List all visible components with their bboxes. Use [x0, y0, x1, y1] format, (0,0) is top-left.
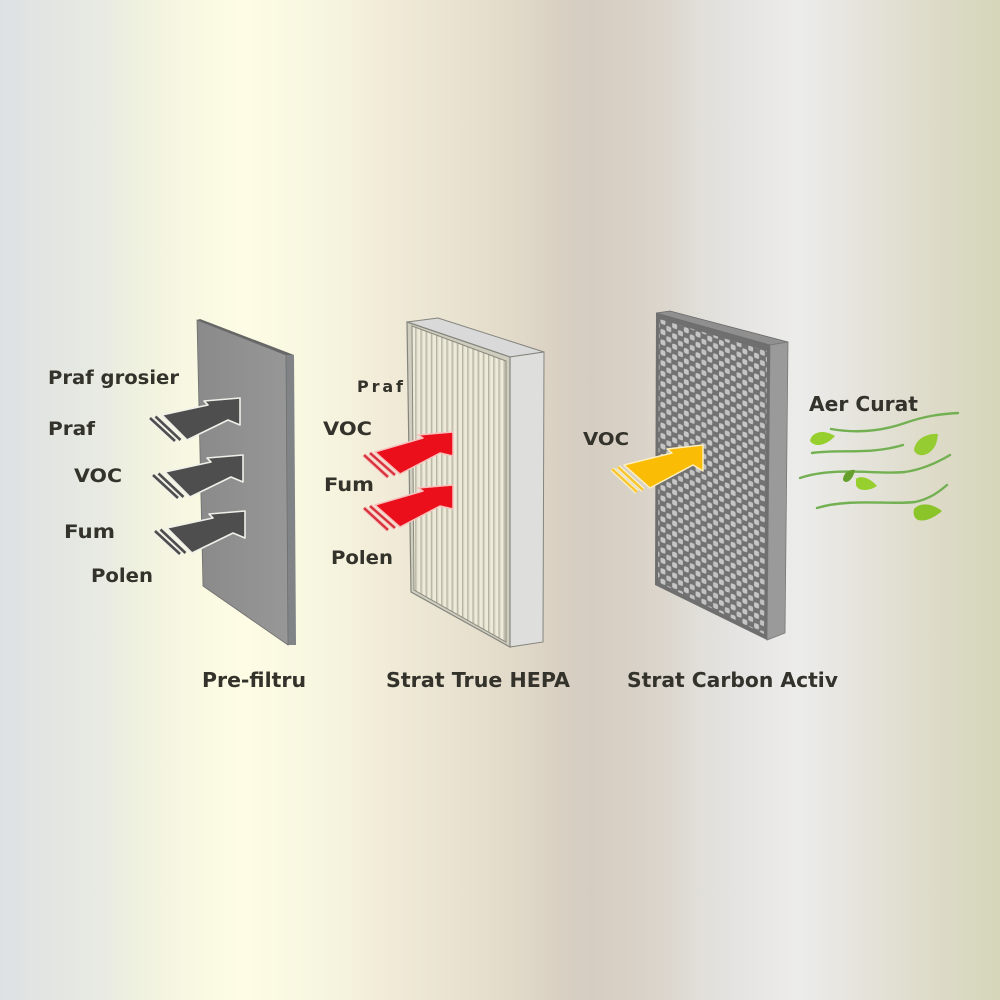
- grey stripes: [155, 530, 186, 554]
- panel: pre-filter: [197, 319, 296, 645]
- HEPA pleats: [412, 327, 506, 641]
- label: Polen HEPA: Polen: [331, 547, 393, 569]
- white stripe halo: [155, 530, 186, 554]
- label: VOC: VOC: [74, 465, 122, 487]
- arrow dark stripes: [150, 416, 180, 441]
- caption: Strat Carbon Activ: Strat Carbon Activ: [627, 668, 838, 692]
- stripe halo: [364, 506, 395, 530]
- grey arrow: [167, 511, 245, 553]
- arrow shape: [165, 455, 243, 497]
- carbon top face: [656, 311, 788, 345]
- carbon honeycomb mesh: [658, 319, 767, 634]
- label: Polen: Polen: [91, 566, 153, 587]
- arrow tail stripes: [150, 416, 180, 441]
- arrow body: [162, 398, 240, 440]
- HEPA top face: [407, 318, 544, 357]
- label: Praf HEPA: Praf: [357, 377, 404, 396]
- panel: True HEPA filter: [407, 318, 544, 650]
- leaf 4: [856, 477, 877, 490]
- arrow: carbon: [612, 445, 703, 492]
- HEPA front frame: [407, 322, 510, 647]
- label: VOC HEPA: VOC: [323, 418, 372, 440]
- caption: Pre-filtru: Pre-filtru: [202, 668, 306, 692]
- label: Fum HEPA: Fum: [324, 474, 374, 496]
- label: Praf grosier: Praf grosier: [48, 368, 180, 389]
- pre-filter front face: [197, 320, 288, 645]
- icon: clean air wind and leaves: [800, 413, 958, 521]
- pre-filter side: [286, 355, 296, 645]
- label: VOC carbon: VOC: [583, 429, 629, 450]
- HEPA side face: [510, 352, 544, 647]
- red arrow shape: [375, 485, 453, 527]
- pale stripe halo: [612, 467, 643, 492]
- dark stripes: [153, 474, 184, 498]
- caption: Strat True HEPA: Strat True HEPA: [386, 668, 571, 692]
- pre-filter top edge: [197, 319, 294, 356]
- arrow: HEPA top: [364, 432, 453, 477]
- carbon frame: [655, 313, 770, 640]
- label: Praf: Praf: [48, 418, 96, 440]
- red stripes: [364, 453, 395, 477]
- leaf 5: [914, 504, 942, 521]
- yellow arrow body: [624, 445, 703, 488]
- red tail stripes: [364, 506, 395, 530]
- leaf 1: [810, 432, 835, 445]
- label: Aer Curat: Aer Curat: [809, 392, 918, 416]
- label: Fum: Fum: [64, 521, 115, 543]
- leaf 3: [843, 470, 855, 482]
- leaf 2: [914, 434, 938, 455]
- stripe halo: [153, 474, 184, 498]
- arrow: pre-filter bottom: [155, 511, 245, 554]
- arrow: pre-filter middle: [153, 455, 243, 498]
- red arrow body: [375, 432, 453, 474]
- wind lines: [800, 413, 958, 508]
- yellow stripes: [612, 467, 643, 492]
- pink stripe halo: [364, 453, 395, 477]
- arrow: pre-filter top: [150, 398, 240, 441]
- arrow: HEPA bottom: [364, 485, 453, 530]
- HEPA inner edge: [412, 326, 506, 642]
- panel: activated carbon filter: [655, 311, 788, 640]
- carbon side face: [767, 342, 788, 640]
